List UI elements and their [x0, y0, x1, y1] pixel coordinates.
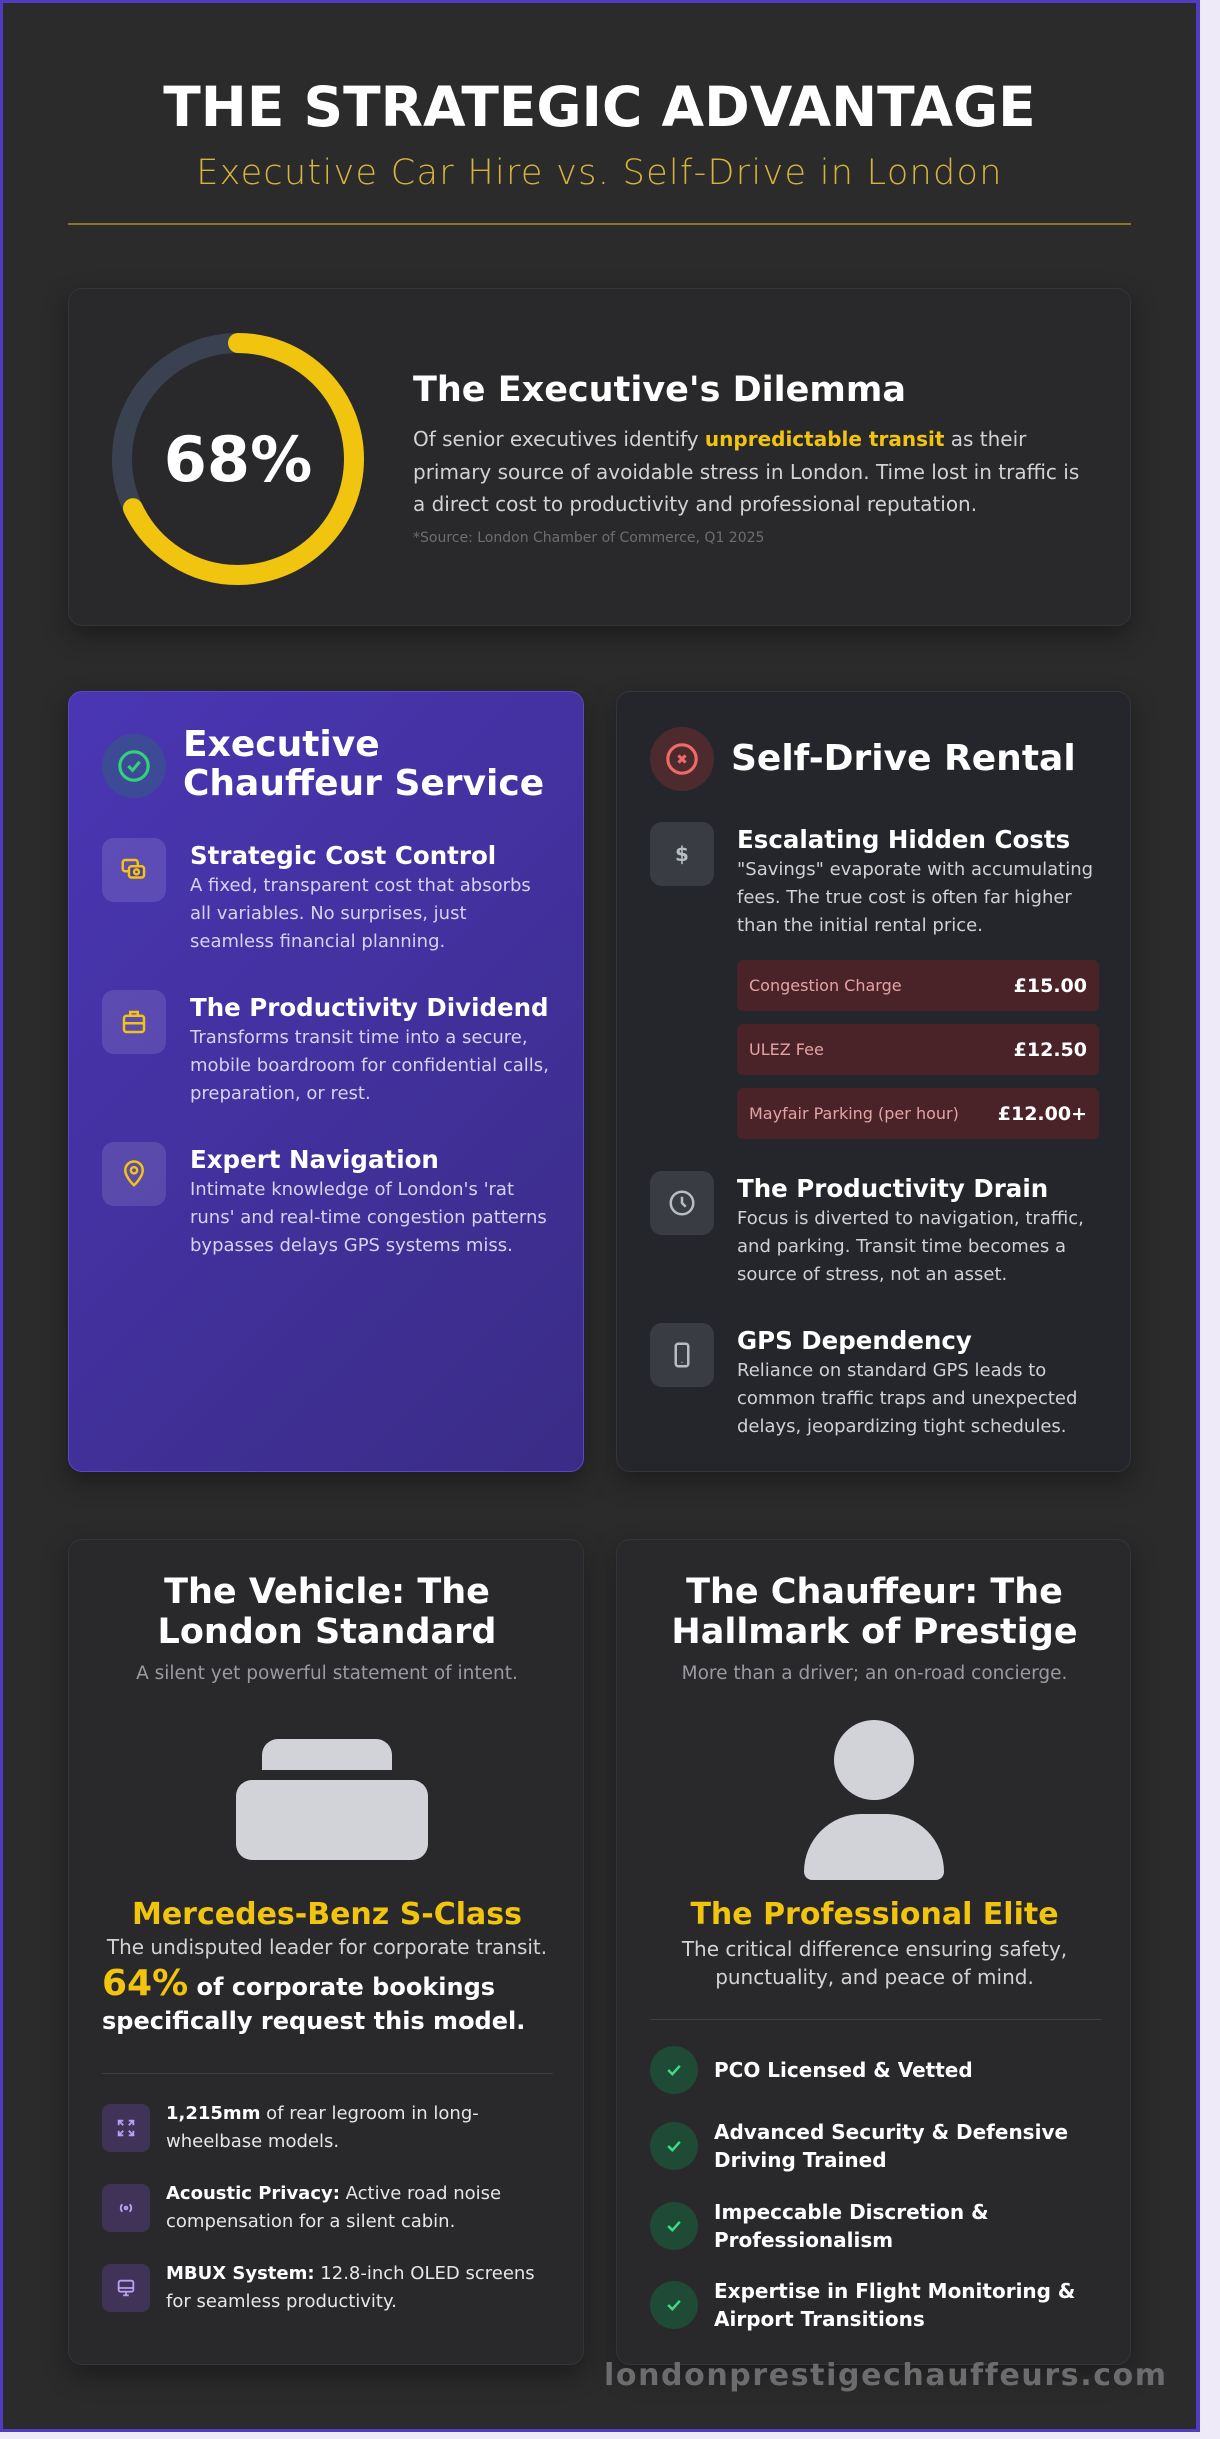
item: hidden costs: Escalating Hidden Costs [737, 825, 1070, 854]
title: THE STRATEGIC ADVANTAGE [163, 75, 1036, 139]
item: hidden costs [650, 822, 1093, 936]
item: productivity drain: The Productivity Drain [737, 1174, 1048, 1203]
subtitle: Executive Car Hire vs. Self-Drive in London [196, 153, 1003, 193]
text: Of senior executives identify unpredictable transit as their primary source of avoidable stress in London. Time lost in traffic is a direct cost to productivity and professional reputation. [413, 427, 1079, 516]
item: productivity dividend: Transforms transit time into a secure, mobile boardroom for confidential calls, preparation, or rest. [190, 1027, 549, 1104]
heading: Executive [183, 724, 380, 765]
fee: ulez: ULEZ Fee [749, 1040, 824, 1059]
item: navigation [102, 1142, 547, 1256]
icon: x [650, 727, 714, 791]
panel: chauffeur [68, 691, 584, 1472]
fee: congestion: £15.00 [1014, 974, 1087, 996]
heading [183, 724, 544, 804]
item: navigation: Expert Navigation [190, 1145, 439, 1174]
icon: check [102, 734, 166, 798]
fee: parking: Mayfair Parking (per hour) [749, 1104, 959, 1123]
panel: vehicle [68, 1539, 584, 2365]
spec: legroom: 1,215mm of rear legroom in long-wheelbase models. [166, 2103, 479, 2152]
model name: Mercedes-Benz S-Class [132, 1897, 522, 1932]
fee: parking [737, 1088, 1099, 1139]
check: pco [650, 2046, 973, 2094]
check: pco: PCO Licensed & Vetted [714, 2058, 973, 2082]
subtitle: More than a driver; an on-road concierge. [682, 1663, 1067, 1684]
elite title: The Professional Elite [690, 1897, 1059, 1932]
panel: dilemma [68, 288, 1131, 626]
fee: ulez: £12.50 [1014, 1038, 1087, 1060]
check: security: Advanced Security & Defensive Driving Trained [714, 2120, 1068, 2172]
heading: Self-Drive Rental [731, 738, 1076, 779]
icon: person [804, 1720, 944, 1880]
check: discretion: Impeccable Discretion & Professionalism [714, 2200, 989, 2252]
panel: chauffeur profile [616, 1539, 1131, 2365]
item: hidden costs: $ [675, 842, 689, 866]
source: *Source: London Chamber of Commerce, Q1 2025 [413, 530, 764, 546]
item: gps: Reliance on standard GPS leads to common traffic traps and unexpected delays, jeopardizing tight schedules. [737, 1360, 1077, 1437]
item: cost control [102, 838, 531, 952]
model desc: The undisputed leader for corporate transit. [107, 1935, 547, 1959]
elite desc: The critical difference ensuring safety, punctuality, and peace of mind. [682, 1937, 1067, 1989]
fee: congestion [737, 960, 1099, 1011]
donut chart 68% [112, 333, 364, 585]
item: productivity dividend [102, 990, 549, 1104]
heading [158, 1572, 496, 1652]
stat 64%: 64% of corporate bookings specifically request this model. [102, 1963, 525, 2035]
item: cost control: A fixed, transparent cost that absorbs all variables. No surprises, just seamless financial planning. [190, 875, 531, 952]
fee: ulez [737, 1024, 1099, 1075]
check: flight: Expertise in Flight Monitoring & Airport Transitions [714, 2279, 1075, 2331]
footer url: londonprestigechauffeurs.com [604, 2358, 1168, 2393]
subtitle: A silent yet powerful statement of intent. [136, 1663, 518, 1684]
item: gps: GPS Dependency [737, 1326, 972, 1355]
fee: parking: £12.00+ [998, 1102, 1087, 1124]
panel: self-drive [616, 691, 1131, 1472]
item: gps [650, 1323, 1077, 1437]
icon: car [236, 1739, 428, 1860]
spec: acoustic: Acoustic Privacy: Active road noise compensation for a silent cabin. [166, 2183, 501, 2232]
donut chart 68%: 68% [164, 423, 312, 496]
item: productivity drain: Focus is diverted to navigation, traffic, and parking. Transit time becomes a source of stress, not an asset. [737, 1208, 1084, 1285]
heading [671, 1572, 1078, 1652]
fee: congestion: Congestion Charge [749, 976, 902, 995]
heading: London Standard [158, 1612, 496, 1652]
item: productivity dividend: The Productivity Dividend [190, 993, 549, 1022]
heading: The Vehicle: The [164, 1572, 490, 1612]
item: navigation: Intimate knowledge of London's 'rat runs' and real-time congestion patterns bypasses delays GPS systems miss. [190, 1179, 547, 1256]
heading: Chauffeur Service [183, 763, 544, 804]
heading: The Chauffeur: The [686, 1572, 1063, 1612]
heading: Hallmark of Prestige [671, 1612, 1078, 1652]
item: productivity drain [650, 1171, 1084, 1285]
spec: mbux: MBUX System: 12.8-inch OLED screens for seamless productivity. [166, 2263, 535, 2312]
item: cost control: Strategic Cost Control [190, 841, 496, 870]
heading: The Executive's Dilemma [413, 370, 906, 410]
item: hidden costs: "Savings" evaporate with accumulating fees. The true cost is often far higher than the initial rental price. [737, 859, 1093, 936]
